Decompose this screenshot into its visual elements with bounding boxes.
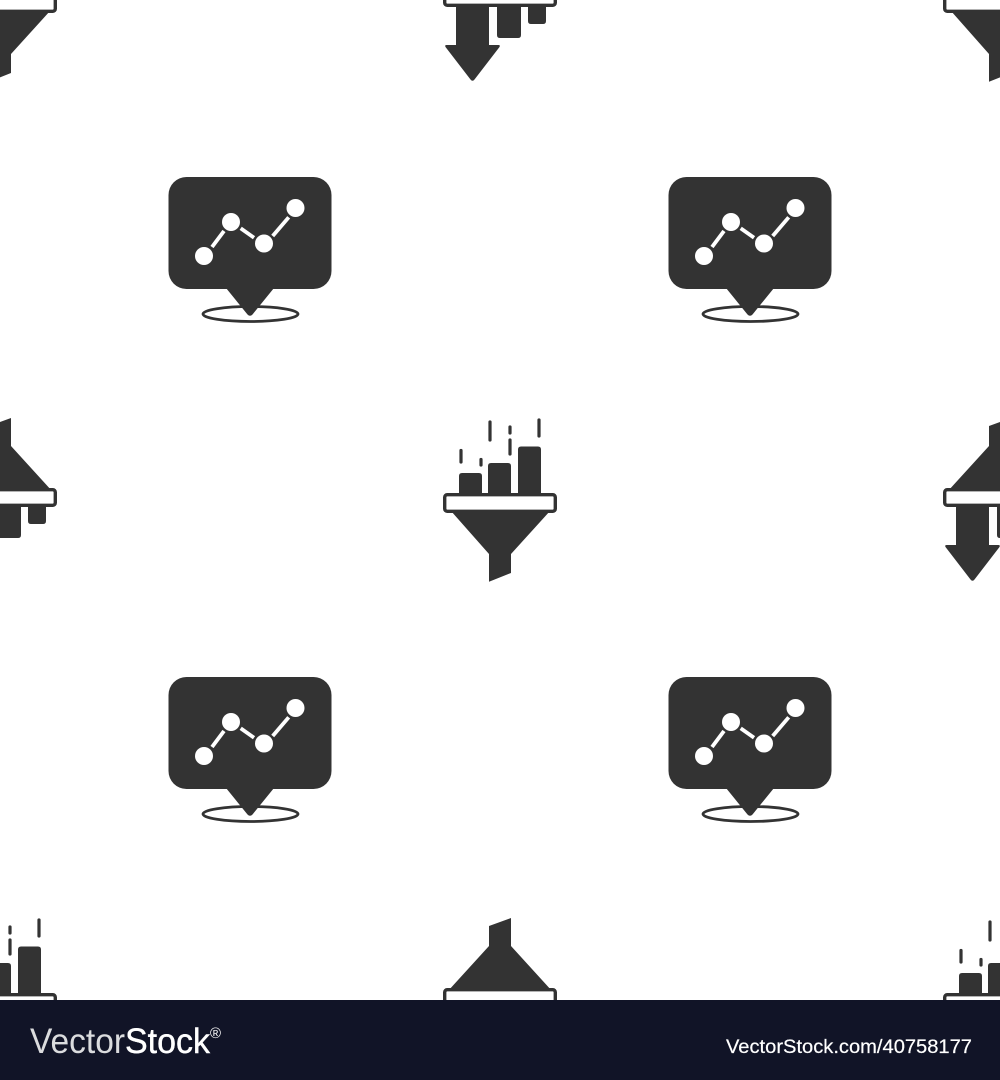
icon: funnel with bars centre xyxy=(445,420,555,582)
footer image id: VectorStock.com/40758177 xyxy=(726,1037,972,1058)
icon: chart pin upper left xyxy=(168,177,332,322)
icon: flipped funnel with arrow fragment middle right xyxy=(945,418,1000,581)
footer logo xyxy=(30,1022,221,1061)
icon: chart pin lower right xyxy=(668,677,832,822)
icon: funnel fragment top left xyxy=(0,0,55,82)
footer bar xyxy=(0,1000,1000,1080)
footer logo: Vector xyxy=(30,1022,125,1061)
footer logo: Stock xyxy=(125,1022,210,1061)
icon: funnel fragment top right xyxy=(945,0,1000,82)
footer logo: ® xyxy=(210,1025,221,1042)
icon: flipped funnel fragment middle left xyxy=(0,418,55,581)
icon: flipped funnel fragment bottom centre xyxy=(445,918,555,1080)
icon: funnel bars fragment bottom left xyxy=(0,920,55,1080)
icon: chart pin lower left xyxy=(168,677,332,822)
icon: funnel bars fragment bottom right xyxy=(945,920,1000,1080)
icon: flipped funnel with arrow fragment top centre xyxy=(445,0,555,81)
icon: chart pin upper right xyxy=(668,177,832,322)
